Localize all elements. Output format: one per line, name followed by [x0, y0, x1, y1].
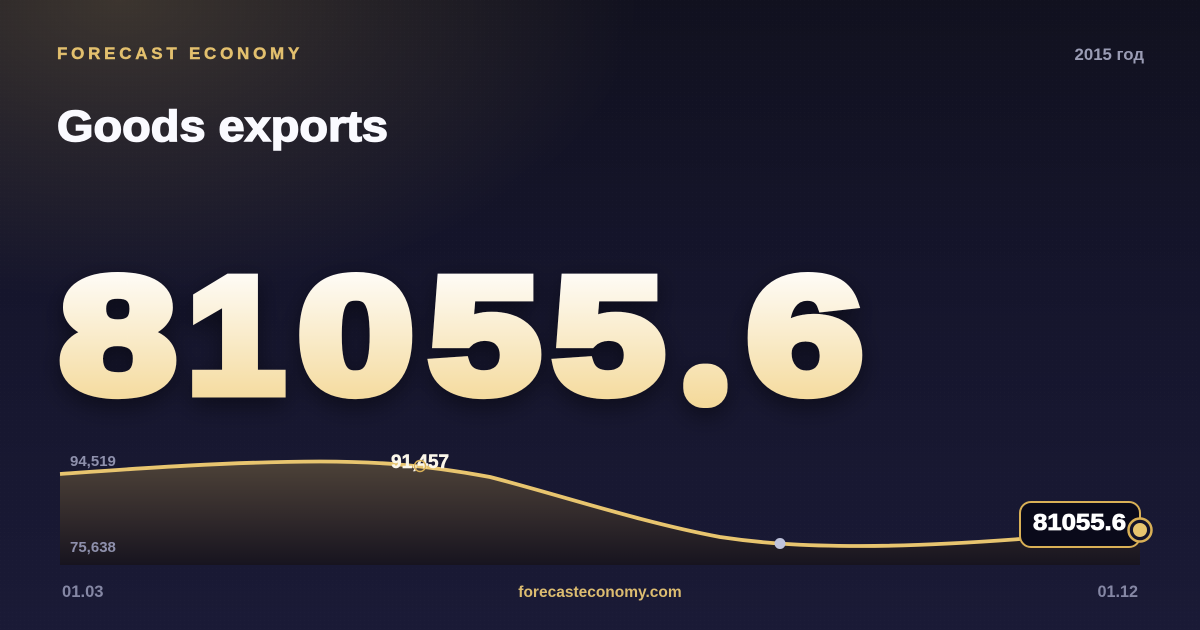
chart area fill [60, 462, 1140, 565]
headline value: 1 [187, 243, 285, 427]
chart line [60, 462, 1020, 546]
year label: 2015 год [1075, 45, 1144, 64]
headline value: 8 [60, 243, 176, 427]
headline value: 5 [553, 243, 664, 427]
end date: 01.12 [1097, 583, 1138, 601]
headline value: . [701, 362, 710, 395]
title: Goods exports [57, 102, 388, 151]
peak marker [414, 460, 426, 472]
start date: 01.03 [62, 582, 104, 601]
current value callout: 81055.6 [1033, 509, 1126, 535]
headline value: 6 [747, 243, 863, 427]
headline value [60, 243, 863, 427]
source website: forecasteconomy.com [518, 584, 682, 601]
minimum axis label: 75,638 [70, 539, 116, 556]
area chart [60, 452, 1152, 565]
current value marker [1128, 518, 1152, 542]
peak value label: 91,457 [391, 452, 449, 473]
maximum axis label: 94,519 [70, 453, 116, 470]
low point marker [774, 538, 786, 549]
headline value: 5 [429, 243, 540, 427]
headline value: 0 [298, 243, 414, 427]
current value callout [1020, 502, 1140, 547]
brand label: FORECAST ECONOMY [57, 44, 303, 63]
